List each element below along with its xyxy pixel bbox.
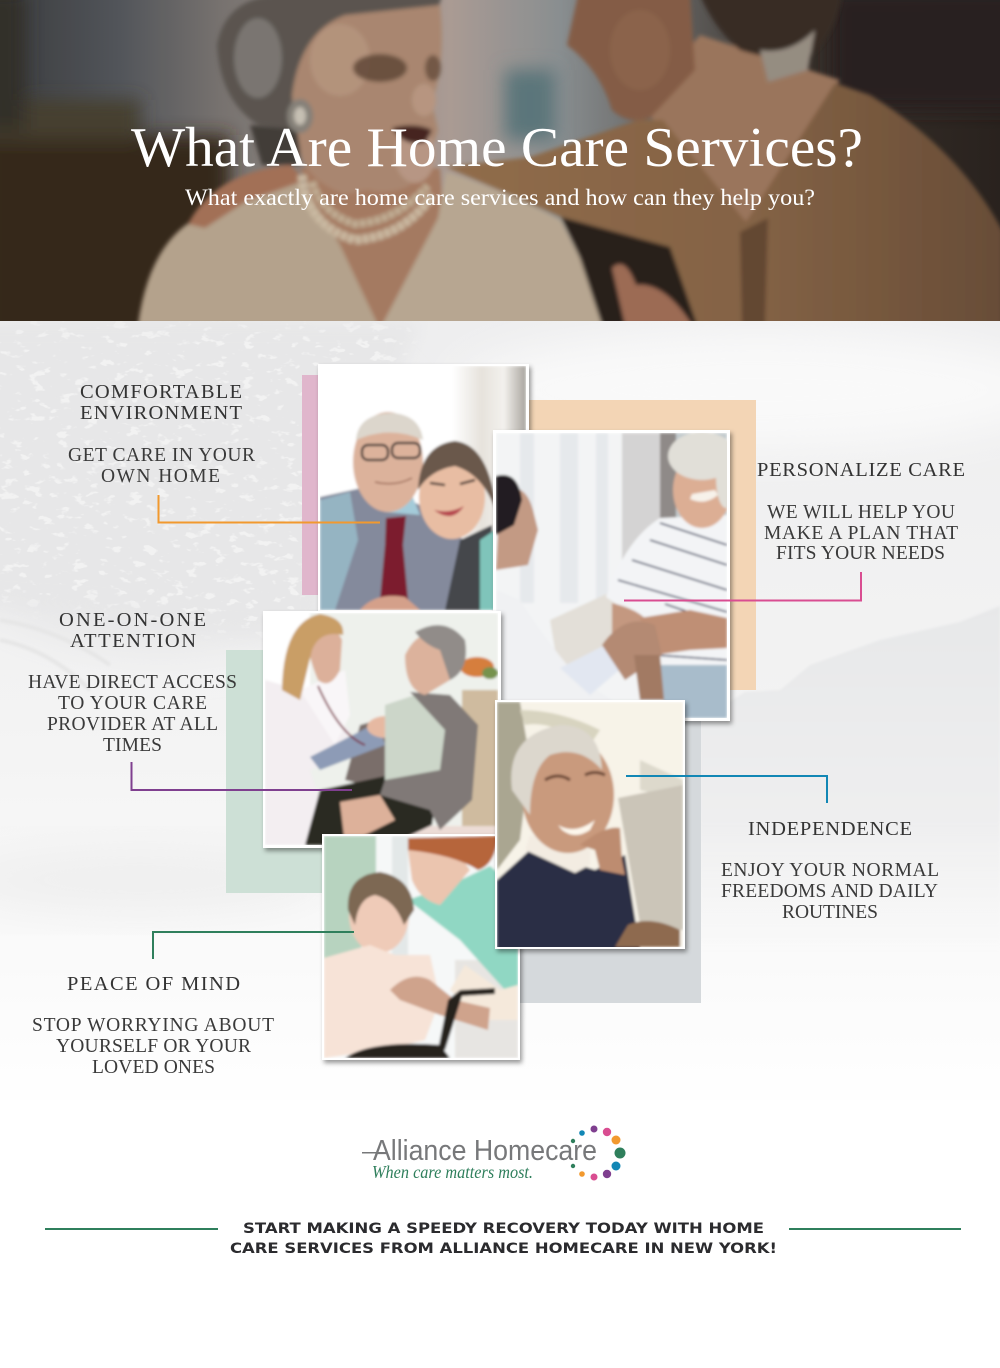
connector: one-on-one attention [132, 762, 352, 790]
call to action: CARE SERVICES FROM ALLIANCE HOMECARE IN NEW YORK! [230, 1241, 777, 1257]
text block: independence: ENJOY YOUR NORMAL [721, 860, 939, 881]
text block: personalize care: PERSONALIZE CARE [757, 459, 965, 481]
text block: peace of mind: YOURSELF OR YOUR [56, 1036, 251, 1057]
accent panel: pink [302, 375, 342, 595]
text block: peace of mind: STOP WORRYING ABOUT [32, 1015, 274, 1036]
photo: nurse comforting woman in wheelchair [322, 834, 520, 1060]
background [0, 321, 1000, 930]
connector: peace of mind [153, 932, 354, 959]
right woman hair [700, 0, 842, 60]
text block: comfortable environment: OWN HOME [101, 466, 220, 487]
left woman chest [300, 168, 445, 325]
title: What Are Home Care Services? [131, 117, 863, 179]
brown arm and cardigan [446, 83, 1000, 325]
text block: one-on-one attention: ATTENTION [70, 630, 196, 652]
text block: comfortable environment: COMFORTABLE [80, 381, 242, 403]
right woman face [567, 0, 695, 120]
call to action [230, 1221, 777, 1257]
text block: peace of mind: PEACE OF MIND [67, 973, 240, 995]
photo: smiling man reading newspaper [495, 700, 685, 950]
hero photo [0, 0, 1000, 345]
photo: nurse checking woman with stethoscope [263, 611, 501, 848]
call to action: START MAKING A SPEEDY RECOVERY TODAY WITH HOME [243, 1221, 764, 1237]
text block: independence [721, 818, 939, 923]
text block: independence: FREEDOMS AND DAILY [721, 881, 938, 902]
subtitle: What exactly are home care services and how can they help you? [185, 185, 815, 210]
dark gap under arm [561, 217, 697, 325]
logo: Alliance Homecare: When care matters most. [372, 1162, 533, 1182]
accent panel: grey [500, 720, 701, 1003]
text block: personalize care: WE WILL HELP YOU [767, 502, 955, 523]
text block: one-on-one attention: HAVE DIRECT ACCESS [28, 672, 237, 693]
text block: comfortable environment: ENVIRONMENT [80, 402, 242, 424]
text block: personalize care: FITS YOUR NEEDS [776, 543, 945, 564]
text block: comfortable environment [68, 381, 255, 487]
divider left [45, 1228, 218, 1230]
holding hand [612, 264, 692, 325]
text block: one-on-one attention: TIMES [103, 735, 162, 756]
earring [287, 99, 313, 133]
pearls [302, 175, 432, 240]
accent panel: peach [510, 400, 756, 690]
logo: Alliance Homecare: Alliance Homecare [373, 1135, 597, 1167]
connector: independence [626, 776, 827, 803]
text block: peace of mind [32, 973, 274, 1078]
text block: comfortable environment: GET CARE IN YOUR [68, 445, 255, 466]
connector: comfortable environment [158, 495, 380, 522]
left woman hair [217, 0, 442, 130]
text block: personalize care [757, 459, 965, 564]
text block: personalize care: MAKE A PLAN THAT [764, 523, 958, 544]
text block: independence: ROUTINES [782, 902, 878, 923]
left woman face [292, 5, 442, 195]
connector: personalize care [624, 572, 861, 600]
text block: one-on-one attention [28, 609, 237, 756]
text block: one-on-one attention: TO YOUR CARE [58, 693, 207, 714]
text block: one-on-one attention: PROVIDER AT ALL [47, 714, 218, 735]
divider right [789, 1228, 961, 1230]
logo dots [571, 1126, 626, 1180]
logo: Alliance Homecare [362, 1126, 626, 1182]
right woman neck [640, 35, 840, 222]
text block: independence: INDEPENDENCE [748, 818, 912, 840]
text block: one-on-one attention: ONE-ON-ONE [59, 609, 206, 631]
left woman sweater [138, 180, 378, 325]
hand on shoulder [188, 165, 306, 228]
photo: senior man and young woman [318, 364, 529, 612]
photo: nurse holding senior woman's hands [493, 430, 736, 721]
accent panel: mint [226, 650, 336, 893]
text block: peace of mind: LOVED ONES [92, 1057, 215, 1078]
